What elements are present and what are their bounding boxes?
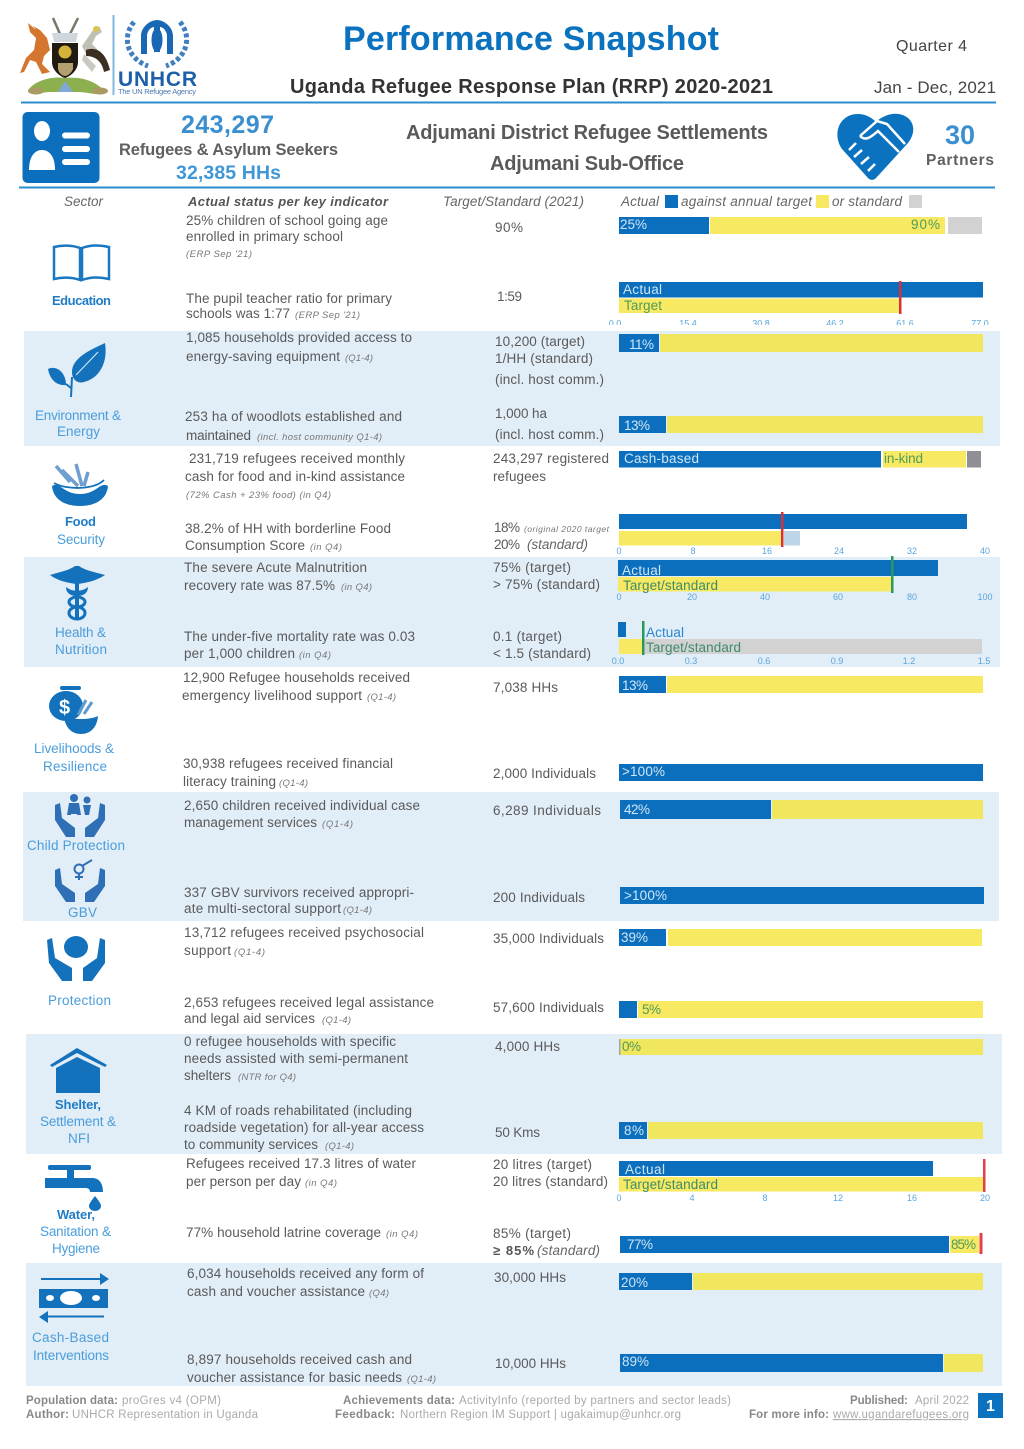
indicator: cash and in-kind food: cash for food and in-kind assistance bbox=[185, 469, 405, 484]
footer: data sources: Author: bbox=[26, 1409, 69, 1421]
indicator: malnutrition: Actual bbox=[622, 563, 661, 578]
sector label: Livelihoods & bbox=[34, 741, 114, 756]
logo divider bbox=[112, 15, 114, 95]
indicator: pupil teacher ratio: 15.4 bbox=[679, 318, 697, 328]
indicator: financial literacy: >100% bbox=[622, 764, 665, 779]
indicator: roads bbox=[184, 1103, 983, 1152]
sector label: Child Protection bbox=[27, 838, 125, 853]
indicator: malnutrition: Target/standard bbox=[623, 578, 718, 593]
indicator: psychosocial: 35,000 Individuals bbox=[493, 931, 604, 946]
indicator: case management: 6,289 Individuals bbox=[493, 803, 601, 818]
indicator: food consumption score bbox=[185, 512, 990, 556]
sector label: Food bbox=[65, 514, 96, 529]
icon: food bowl bbox=[52, 464, 108, 506]
indicator: litres of water: Refugees received 17.3 litres of water bbox=[186, 1156, 416, 1171]
icon: hands with children bbox=[55, 794, 105, 837]
indicator: litres of water: 20 litres (target) bbox=[493, 1157, 592, 1172]
sector label bbox=[34, 741, 114, 774]
footer: publication info: For more info: bbox=[749, 1409, 829, 1421]
indicator: under-five mortality: 0.6 bbox=[758, 656, 770, 666]
indicator: under-five mortality: The under-five mortality rate was 0.03 bbox=[184, 629, 415, 644]
indicator: food consumption score: 40 bbox=[980, 546, 990, 556]
indicator: latrine coverage: (in Q4) bbox=[386, 1229, 418, 1240]
indicator: financial literacy bbox=[183, 756, 983, 789]
sector label bbox=[40, 1097, 116, 1146]
icon: leaves bbox=[48, 343, 106, 397]
indicator: semi-permanent shelters: needs assisted with semi-permanent bbox=[184, 1051, 408, 1066]
table header and legend: or standard bbox=[832, 194, 902, 209]
indicator: semi-permanent shelters: (NTR for Q4) bbox=[238, 1072, 296, 1083]
sector label bbox=[32, 1330, 109, 1363]
indicator: litres of water: 0 bbox=[616, 1193, 622, 1203]
indicator: cash and in-kind food: 243,297 registered bbox=[493, 451, 609, 466]
indicator: psychosocial: 13,712 refugees received psychosocial bbox=[184, 925, 424, 940]
table header and legend: Target/Standard (2021) bbox=[443, 194, 584, 209]
indicator: any cash and voucher: 20% bbox=[621, 1275, 648, 1290]
panel: environment and energy bbox=[24, 330, 1000, 446]
indicator: food consumption score: 20% bbox=[494, 537, 520, 552]
indicator: food consumption score: (original 2020 target bbox=[524, 524, 610, 534]
footer: data sources bbox=[26, 1395, 259, 1421]
indicator: pupil teacher ratio: schools was 1:77 bbox=[186, 306, 290, 321]
indicator: pupil teacher ratio: Target bbox=[624, 298, 662, 313]
indicator: emergency livelihood: (Q1-4) bbox=[367, 692, 396, 703]
indicator: basic needs cash bbox=[187, 1352, 983, 1385]
footer bbox=[26, 1393, 1003, 1421]
indicator: enrolment: 25% children of school going age bbox=[186, 213, 388, 228]
indicator: case management: 42% bbox=[624, 802, 650, 817]
sector label: Cash-Based bbox=[32, 1330, 109, 1345]
footer: publication info bbox=[749, 1395, 969, 1421]
header bbox=[20, 15, 996, 98]
icon: water tap bbox=[45, 1165, 103, 1211]
footer: data sources: UNHCR Representation in Uganda bbox=[72, 1409, 259, 1421]
indicator: under-five mortality: 1.2 bbox=[903, 656, 915, 666]
indicator: pupil teacher ratio: 30.8 bbox=[752, 318, 770, 328]
sector label: Energy bbox=[57, 424, 100, 439]
indicator: legal assistance: and legal aid services bbox=[184, 1011, 315, 1026]
indicator: psychosocial: (Q1-4) bbox=[234, 947, 265, 958]
indicator: energy saving: 1/HH (standard) bbox=[495, 351, 593, 366]
indicator: case management: 2,650 children received individual case bbox=[184, 798, 420, 813]
sector label: Resilience bbox=[43, 759, 107, 774]
indicator: malnutrition: 20 bbox=[687, 592, 697, 602]
indicator: GBV support: 337 GBV survivors received appropri- bbox=[184, 885, 414, 900]
indicator: enrolment: 25% bbox=[620, 217, 647, 232]
icon: banknote with arrows bbox=[39, 1273, 109, 1323]
sector label: Security bbox=[57, 532, 105, 547]
icon: money bag and bowl bbox=[49, 686, 98, 734]
sector label: Nutrition bbox=[55, 642, 107, 657]
indicator: roads: to community services bbox=[184, 1137, 318, 1152]
panel: shelter, settlement and NFI bbox=[26, 1034, 1002, 1154]
location heading: Adjumani District Refugee Settlements bbox=[406, 122, 768, 144]
quarter: Quarter 4 bbox=[896, 38, 967, 55]
indicator: food consumption score: (standard) bbox=[527, 537, 588, 552]
indicator: latrine coverage: 77% household latrine coverage bbox=[186, 1225, 381, 1240]
indicator: food consumption score: (in Q4) bbox=[310, 542, 342, 553]
indicator: malnutrition: The severe Acute Malnutrition bbox=[184, 560, 367, 575]
table header and legend bbox=[64, 194, 922, 209]
indicator: malnutrition: (in Q4) bbox=[341, 582, 372, 593]
indicator: case management: (Q1-4) bbox=[322, 819, 353, 830]
logo: UNHCR emblem: The UN Refugee Agency bbox=[118, 87, 196, 96]
panel: education bbox=[52, 213, 1000, 331]
indicator: financial literacy: literacy training bbox=[183, 774, 276, 789]
location heading: Adjumani Sub-Office bbox=[490, 153, 684, 175]
indicator: latrine coverage: (standard) bbox=[537, 1243, 600, 1258]
indicator: under-five mortality: 0.1 (target) bbox=[493, 629, 562, 644]
indicator: malnutrition bbox=[184, 556, 993, 602]
sector label: Hygiene bbox=[52, 1241, 100, 1256]
summary band bbox=[22, 111, 994, 184]
indicator: food consumption score: 18% bbox=[494, 520, 520, 535]
indicator: basic needs cash: voucher assistance for basic needs bbox=[187, 1370, 402, 1385]
indicator: enrolment: (ERP Sep '21) bbox=[186, 249, 252, 260]
indicator: financial literacy: 30,938 refugees received financial bbox=[183, 756, 393, 771]
indicator: case management: management services bbox=[184, 815, 317, 830]
indicator: under-five mortality: (in Q4) bbox=[299, 650, 331, 661]
indicator: malnutrition: 75% (target) bbox=[493, 560, 571, 575]
sector label bbox=[40, 1207, 111, 1256]
indicator: basic needs cash: 89% bbox=[622, 1354, 649, 1369]
icon: open book bbox=[54, 246, 109, 280]
sector label: Sanitation & bbox=[40, 1224, 111, 1239]
indicator: pupil teacher ratio: (ERP Sep '21) bbox=[295, 310, 360, 321]
icon: hands around person bbox=[47, 936, 105, 981]
indicator: energy saving: 10,200 (target) bbox=[495, 334, 585, 349]
indicator: litres of water: 20 bbox=[980, 1193, 990, 1203]
sector label: Environment & bbox=[35, 408, 121, 423]
sector label: Protection bbox=[48, 993, 111, 1008]
indicator: food consumption score: 0 bbox=[616, 546, 622, 556]
indicator: semi-permanent shelters: 4,000 HHs bbox=[495, 1039, 560, 1054]
indicator: malnutrition: 100 bbox=[977, 592, 993, 602]
page number bbox=[978, 1393, 1003, 1418]
indicator: enrolment bbox=[186, 213, 982, 260]
indicator: GBV support bbox=[184, 885, 984, 916]
panel: water, sanitation and hygiene bbox=[40, 1156, 990, 1258]
indicator: pupil teacher ratio: 46.2 bbox=[826, 318, 844, 328]
sector label: Shelter, bbox=[55, 1097, 101, 1112]
sector label: NFI bbox=[68, 1131, 90, 1146]
indicator: pupil teacher ratio: 1:59 bbox=[497, 289, 522, 304]
indicator: litres of water: 4 bbox=[689, 1193, 695, 1203]
indicator: any cash and voucher: (Q4) bbox=[369, 1288, 389, 1299]
indicator: semi-permanent shelters: shelters bbox=[184, 1068, 231, 1083]
indicator: woodlots: 1,000 ha bbox=[495, 406, 547, 421]
indicator: roads: (Q1-4) bbox=[325, 1141, 354, 1152]
indicator: roads: 4 KM of roads rehabilitated (including bbox=[184, 1103, 412, 1118]
indicator: pupil teacher ratio: The pupil teacher ratio for primary bbox=[186, 291, 392, 306]
indicator: cash and in-kind food: in-kind bbox=[884, 451, 923, 466]
indicator: GBV support: (Q1-4) bbox=[343, 905, 372, 916]
icon: house bbox=[50, 1048, 107, 1093]
indicator: GBV support: 200 Individuals bbox=[493, 890, 585, 905]
indicator: latrine coverage: ≥ 85% bbox=[493, 1243, 534, 1258]
indicator: any cash and voucher: 6,034 households received any form of bbox=[187, 1266, 424, 1281]
indicator: basic needs cash: (Q1-4) bbox=[407, 1374, 436, 1385]
indicator: malnutrition: 0 bbox=[616, 592, 622, 602]
indicator: emergency livelihood bbox=[182, 670, 983, 703]
indicator: litres of water: per person per day bbox=[186, 1174, 301, 1189]
sector label: Interventions bbox=[33, 1348, 109, 1363]
indicator: cash and in-kind food: 231,719 refugees received monthly bbox=[189, 451, 405, 466]
footer: achievements and feedback: Feedback: bbox=[335, 1409, 395, 1421]
indicator: basic needs cash: 10,000 HHs bbox=[495, 1356, 566, 1371]
indicator: malnutrition: recovery rate was 87.5% bbox=[184, 578, 335, 593]
indicator: enrolment: enrolled in primary school bbox=[186, 229, 343, 244]
sector label: GBV bbox=[68, 905, 97, 920]
panel: protection bbox=[47, 925, 983, 1026]
title: Performance Snapshot bbox=[343, 20, 719, 58]
indicator: under-five mortality: 0.3 bbox=[685, 656, 697, 666]
indicator: cash and in-kind food bbox=[185, 451, 981, 501]
footer: achievements and feedback bbox=[335, 1395, 731, 1421]
indicator: pupil teacher ratio: 61.6 bbox=[896, 318, 914, 328]
indicator: case management bbox=[184, 798, 983, 830]
table header and legend: Actual bbox=[620, 194, 660, 209]
indicator: semi-permanent shelters: 0% bbox=[622, 1039, 641, 1054]
indicator: legal assistance bbox=[184, 995, 983, 1026]
refugee population: Refugees & Asylum Seekers bbox=[119, 141, 338, 159]
indicator: financial literacy: (Q1-4) bbox=[279, 778, 308, 789]
icon: money bag and bowl: $ bbox=[59, 697, 70, 719]
partners: Partners bbox=[926, 152, 994, 169]
refugee population: 32,385 HHs bbox=[176, 162, 281, 184]
indicator: litres of water: 8 bbox=[762, 1193, 768, 1203]
footer: publication info: April 2022 bbox=[915, 1395, 969, 1407]
indicator: energy saving: (Q1-4) bbox=[345, 353, 373, 364]
refugee population bbox=[119, 111, 338, 184]
indicator: emergency livelihood: 13% bbox=[622, 678, 648, 693]
sector label bbox=[57, 514, 105, 547]
sector label: Education bbox=[52, 293, 111, 308]
panel: health and nutrition bbox=[24, 556, 1000, 667]
indicator: legal assistance: 57,600 Individuals bbox=[493, 1000, 604, 1015]
panel: food security bbox=[52, 451, 990, 556]
page number: 1 bbox=[986, 1398, 995, 1415]
indicator: semi-permanent shelters bbox=[184, 1034, 983, 1083]
indicator: semi-permanent shelters: 0 refugee households with specific bbox=[184, 1034, 396, 1049]
footer: achievements and feedback: Northern Region IM Support | ugakaimup@unhcr.org bbox=[400, 1409, 681, 1421]
indicator: roads: 8% bbox=[624, 1123, 644, 1138]
indicator: under-five mortality: 0.9 bbox=[831, 656, 843, 666]
indicator: legal assistance: 2,653 refugees received legal assistance bbox=[184, 995, 434, 1010]
indicator: psychosocial: support bbox=[184, 943, 231, 958]
indicator: food consumption score: 32 bbox=[907, 546, 917, 556]
indicator: pupil teacher ratio: 77.0 bbox=[971, 318, 989, 328]
indicator: malnutrition: 40 bbox=[760, 592, 770, 602]
indicator: litres of water: Actual bbox=[625, 1162, 665, 1177]
sector label: Health & bbox=[55, 625, 106, 640]
indicator: psychosocial: 39% bbox=[621, 930, 648, 945]
indicator: latrine coverage bbox=[186, 1225, 982, 1258]
indicator: litres of water: 20 litres (standard) bbox=[493, 1174, 608, 1189]
partners: 30 bbox=[945, 120, 975, 150]
partners bbox=[926, 120, 994, 169]
panel: child protection and GBV bbox=[23, 792, 999, 921]
indicator: energy saving: (incl. host comm.) bbox=[495, 372, 604, 387]
indicator: cash and in-kind food: (72% Cash + 23% food) (in Q4) bbox=[186, 490, 331, 501]
indicator: under-five mortality: < 1.5 (standard) bbox=[493, 646, 591, 661]
panel: livelihoods and resilience bbox=[34, 670, 983, 789]
sector label: Settlement & bbox=[40, 1114, 116, 1129]
logo: UNHCR emblem bbox=[118, 20, 197, 96]
refugee population: 243,297 bbox=[181, 111, 274, 139]
footer: publication info: Published: bbox=[850, 1395, 908, 1407]
icon: caduceus bbox=[50, 566, 105, 620]
subtitle: Uganda Refugee Response Plan (RRP) 2020-2021 bbox=[290, 76, 773, 98]
indicator: under-five mortality: Actual bbox=[646, 625, 684, 640]
footer: data sources: Population data: bbox=[26, 1395, 118, 1407]
indicator: malnutrition: > 75% (standard) bbox=[493, 577, 600, 592]
indicator: energy saving: 1,085 households provided access to bbox=[186, 330, 412, 345]
date range: Jan - Dec, 2021 bbox=[874, 78, 996, 97]
table header and legend: against annual target bbox=[681, 194, 813, 209]
indicator: woodlots bbox=[185, 406, 983, 443]
indicator: under-five mortality: 1.5 bbox=[978, 656, 990, 666]
indicator: roads: roadside vegetation) for all-year access bbox=[184, 1120, 424, 1135]
indicator: any cash and voucher bbox=[187, 1266, 983, 1299]
indicator: under-five mortality: 0.0 bbox=[612, 656, 624, 666]
indicator: litres of water: 12 bbox=[833, 1193, 843, 1203]
indicator: under-five mortality: per 1,000 children bbox=[184, 646, 295, 661]
indicator: malnutrition: 60 bbox=[833, 592, 843, 602]
logo: Uganda coat of arms bbox=[20, 18, 110, 94]
indicator: cash and in-kind food: refugees bbox=[493, 469, 546, 484]
indicator: pupil teacher ratio: 0.0 bbox=[609, 318, 621, 328]
indicator: litres of water: Target/standard bbox=[623, 1177, 718, 1192]
indicator: enrolment: 90% bbox=[911, 217, 940, 232]
indicator: emergency livelihood: emergency livelihood support bbox=[182, 688, 362, 703]
indicator: GBV support: >100% bbox=[624, 888, 667, 903]
table header and legend: Actual status per key indicator bbox=[187, 194, 389, 209]
indicator: food consumption score: 24 bbox=[834, 546, 844, 556]
indicator: food consumption score: 16 bbox=[762, 546, 772, 556]
indicator: energy saving: 11% bbox=[629, 337, 654, 352]
sector label bbox=[35, 408, 121, 439]
indicator: emergency livelihood: 7,038 HHs bbox=[493, 680, 558, 695]
indicator: emergency livelihood: 12,900 Refugee households received bbox=[183, 670, 410, 685]
indicator: food consumption score: 8 bbox=[690, 546, 696, 556]
indicator: woodlots: (incl. host community Q1-4) bbox=[257, 432, 382, 443]
footer: publication info: www.ugandarefugees.org bbox=[832, 1409, 969, 1421]
indicator: woodlots: 13% bbox=[624, 418, 650, 433]
sector label: Water, bbox=[57, 1207, 95, 1222]
logo: UNHCR emblem: UNHCR bbox=[118, 68, 197, 91]
indicator: energy saving: energy-saving equipment bbox=[186, 349, 340, 364]
indicator: enrolment: 90% bbox=[495, 220, 523, 235]
indicator: psychosocial bbox=[184, 925, 982, 958]
indicator: GBV support: ate multi-sectoral support bbox=[184, 901, 341, 916]
location heading bbox=[406, 122, 768, 175]
indicator: latrine coverage: 77% bbox=[627, 1237, 653, 1252]
table header and legend: Sector bbox=[64, 194, 104, 209]
footer: data sources: proGres v4 (OPM) bbox=[122, 1395, 221, 1407]
indicator: litres of water: 16 bbox=[907, 1193, 917, 1203]
panel: cash-based interventions bbox=[26, 1263, 1002, 1386]
indicator: woodlots: maintained bbox=[186, 428, 251, 443]
indicator: under-five mortality: Target/standard bbox=[646, 640, 741, 655]
indicator: food consumption score: 38.2% of HH with borderline Food bbox=[185, 521, 391, 536]
indicator: woodlots: (incl. host comm.) bbox=[495, 427, 604, 442]
icon: hands with gender symbols bbox=[55, 860, 105, 902]
indicator: energy saving bbox=[186, 330, 983, 387]
indicator: basic needs cash: 8,897 households received cash and bbox=[187, 1352, 412, 1367]
indicator: latrine coverage: 85% (target) bbox=[493, 1226, 571, 1241]
indicator: woodlots: 253 ha of woodlots established and bbox=[185, 409, 402, 424]
indicator: financial literacy: 2,000 Individuals bbox=[493, 766, 596, 781]
indicator: malnutrition: 80 bbox=[907, 592, 917, 602]
indicator: legal assistance: 5% bbox=[642, 1002, 661, 1017]
indicator: pupil teacher ratio bbox=[186, 281, 1000, 331]
sector label bbox=[55, 625, 107, 657]
indicator: litres of water: (in Q4) bbox=[305, 1178, 337, 1189]
indicator: latrine coverage: 85% bbox=[951, 1237, 976, 1252]
indicator: litres of water bbox=[186, 1156, 990, 1203]
indicator: roads: 50 Kms bbox=[495, 1125, 540, 1140]
icon: person card bbox=[22, 112, 100, 183]
footer: achievements and feedback: Achievements data: bbox=[343, 1395, 455, 1407]
indicator: any cash and voucher: cash and voucher assistance bbox=[187, 1284, 365, 1299]
indicator: pupil teacher ratio: Actual bbox=[623, 282, 662, 297]
indicator: legal assistance: (Q1-4) bbox=[322, 1015, 351, 1026]
indicator: food consumption score: Consumption Score bbox=[185, 538, 305, 553]
footer: achievements and feedback: ActivityInfo (reported by partners and sector leads) bbox=[459, 1395, 731, 1407]
indicator: any cash and voucher: 30,000 HHs bbox=[494, 1270, 566, 1285]
icon: handshake heart bbox=[837, 114, 913, 180]
indicator: cash and in-kind food: Cash-based bbox=[624, 451, 699, 466]
indicator: under-five mortality bbox=[184, 621, 990, 666]
